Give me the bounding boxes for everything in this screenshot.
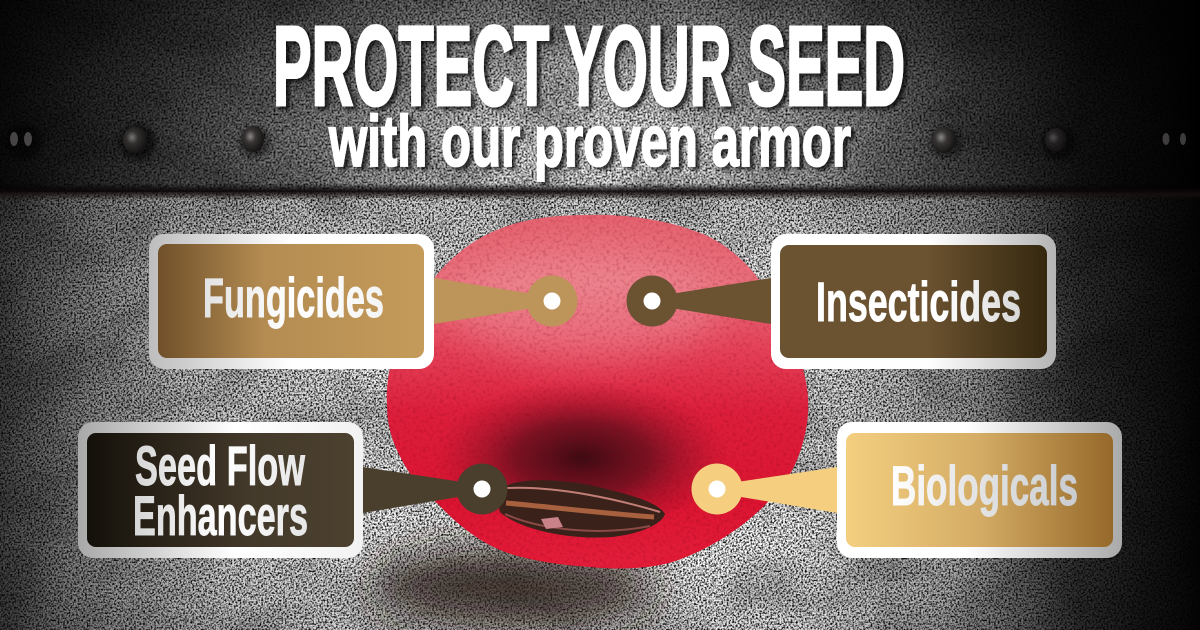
red coated seed [380,210,815,580]
callout: Fungicides: Fungicides [203,266,384,329]
seed shadow [375,548,655,628]
callout: Biologicals: Biologicals [891,454,1078,517]
callout: Insecticides [626,234,1056,369]
callout: Seed Flow Enhancers: Enhancers [133,484,308,547]
rivets along the top plate [6,124,1186,160]
callout: Biologicals [692,422,1122,558]
callout: Insecticides: Insecticides [816,270,1021,333]
subtitle: with our proven armor [328,102,851,182]
callout: Seed Flow Enhancers [78,422,508,558]
callout: Seed Flow Enhancers: Seed Flow [135,434,305,497]
hilum scar on the seed [498,480,665,538]
callout: Fungicides [149,234,578,369]
